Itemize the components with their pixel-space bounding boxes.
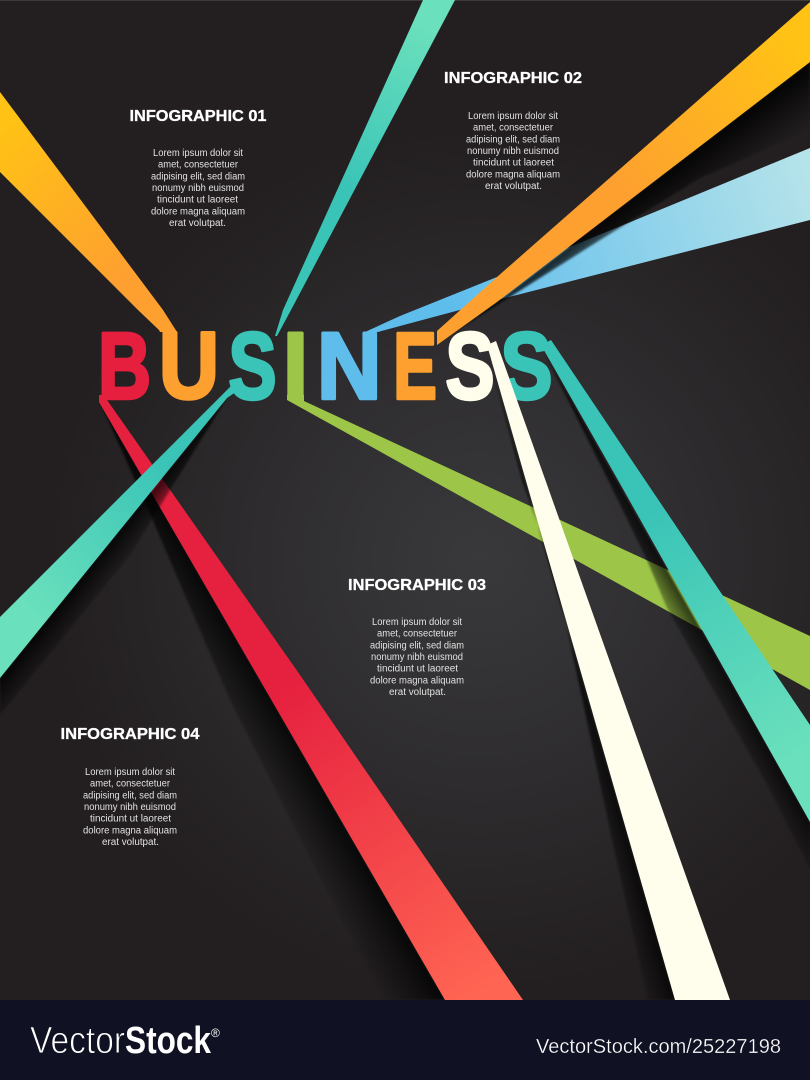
footer logo: Stock xyxy=(125,1020,212,1062)
title: BUSINESS: E xyxy=(393,314,437,420)
text block: infographic 01: amet, consectetuer xyxy=(158,160,239,171)
title: BUSINESS: S xyxy=(500,314,552,420)
ribbon: red xyxy=(99,395,523,1000)
ribbon: blue xyxy=(365,148,810,332)
footer url: VectorStock.com/25227198 xyxy=(536,1035,781,1058)
text block: infographic 02: amet, consectetuer xyxy=(473,123,554,134)
text block: infographic 02: tincidunt ut laoreet xyxy=(473,158,554,169)
title: BUSINESS: N xyxy=(317,314,382,420)
title: BUSINESS: S xyxy=(228,314,276,420)
ribbon: right orange xyxy=(437,2,810,345)
footer logo xyxy=(30,1020,220,1062)
ribbon: cream xyxy=(487,341,730,1000)
text block: infographic 03: erat volutpat. xyxy=(389,687,446,698)
shadow: cream ribbon xyxy=(490,360,675,1000)
text block: infographic 02 xyxy=(444,70,582,192)
title: BUSINESS: U xyxy=(159,313,219,419)
text block: infographic 04: INFOGRAPHIC 04 xyxy=(60,726,200,743)
text block: infographic 02: adipising elit, sed diam xyxy=(466,134,560,145)
text block: infographic 04: Lorem ipsum dolor sit xyxy=(85,767,175,778)
text block: infographic 03: amet, consectetuer xyxy=(377,629,458,640)
footer bar xyxy=(0,1000,810,1080)
text block: infographic 02: nonumy nibh euismod xyxy=(467,146,559,157)
text block: infographic 01: erat volutpat. xyxy=(169,218,226,229)
text block: infographic 03: Lorem ipsum dolor sit xyxy=(372,617,462,628)
text block: infographic 01: Lorem ipsum dolor sit xyxy=(153,148,243,159)
text block: infographic 01: adipising elit, sed diam xyxy=(151,171,245,182)
text block: infographic 04: erat volutpat. xyxy=(102,837,159,848)
text block: infographic 04: adipising elit, sed diam xyxy=(83,790,177,801)
text block: infographic 03: adipising elit, sed diam xyxy=(370,640,464,651)
ribbon: top teal xyxy=(275,0,455,336)
shadow: right teal ribbon xyxy=(543,350,810,870)
text block: infographic 01: tincidunt ut laoreet xyxy=(157,195,238,206)
text block: infographic 03: nonumy nibh euismod xyxy=(371,652,463,663)
text block: infographic 01: dolore magna aliquam xyxy=(151,206,245,217)
title: BUSINESS: S xyxy=(446,314,494,420)
ribbon: right teal xyxy=(541,340,810,822)
text block: infographic 03 xyxy=(348,577,486,698)
text block: infographic 03: tincidunt ut laoreet xyxy=(377,664,458,675)
shadow: red ribbon xyxy=(100,402,445,1000)
footer logo: Vector xyxy=(30,1020,125,1062)
text block: infographic 04: tincidunt ut laoreet xyxy=(90,814,171,825)
text block: infographic 03: dolore magna aliquam xyxy=(370,675,464,686)
ribbon: lower-left teal xyxy=(0,385,240,678)
ribbon: green xyxy=(287,395,810,690)
text block: infographic 01: INFOGRAPHIC 01 xyxy=(130,108,267,125)
footer logo: ® xyxy=(211,1026,220,1040)
title: BUSINESS xyxy=(98,313,552,420)
text block: infographic 04: dolore magna aliquam xyxy=(83,825,177,836)
shadow: orange ribbon on blue xyxy=(445,62,810,338)
text block: infographic 02: INFOGRAPHIC 02 xyxy=(444,70,582,87)
text block: infographic 01: nonumy nibh euismod xyxy=(152,183,244,194)
text block: infographic 02: Lorem ipsum dolor sit xyxy=(468,111,558,122)
shadow: lower-left teal ribbon xyxy=(0,398,227,715)
text block: infographic 02: erat volutpat. xyxy=(485,181,542,192)
text block: infographic 04: amet, consectetuer xyxy=(90,779,171,790)
title: BUSINESS: B xyxy=(98,314,151,420)
text block: infographic 01 xyxy=(130,108,267,229)
title: BUSINESS: I xyxy=(283,314,308,420)
text block: infographic 03: INFOGRAPHIC 03 xyxy=(348,577,486,594)
text block: infographic 04: nonumy nibh euismod xyxy=(84,802,176,813)
ribbon: left orange xyxy=(0,92,177,332)
text block: infographic 02: dolore magna aliquam xyxy=(466,169,560,180)
text block: infographic 04 xyxy=(60,726,200,848)
